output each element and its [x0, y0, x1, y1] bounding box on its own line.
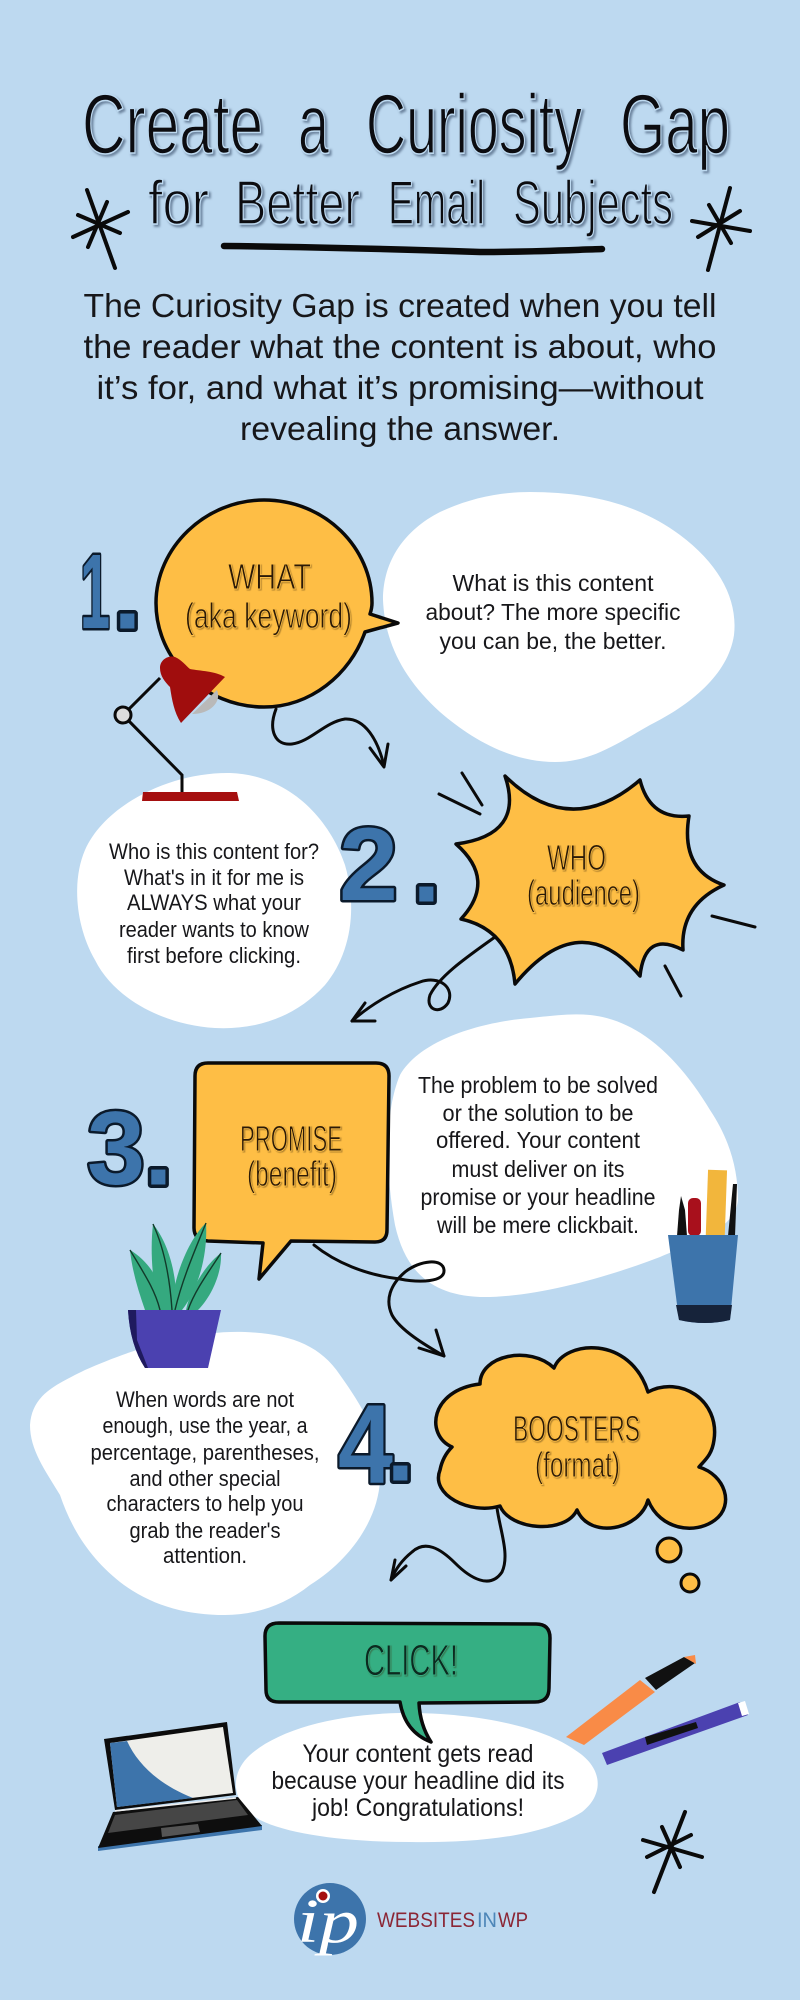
what heading: WHAT: [228, 556, 311, 597]
boosters subheading: (format): [535, 1444, 620, 1485]
who description text: Who is this content for?: [109, 839, 319, 864]
white blob: promise description: [388, 1014, 738, 1297]
speech bubble: promise: [194, 1063, 389, 1279]
click description text: because your headline did its: [272, 1767, 564, 1795]
boosters description text: percentage, parentheses,: [90, 1440, 320, 1465]
subtitle underline: [224, 246, 602, 252]
logo: websites in wp: [294, 1883, 528, 1956]
icon: left star: [73, 190, 128, 268]
click description text: Your content gets read: [302, 1740, 534, 1768]
white blob: who description: [77, 773, 351, 1028]
title: Curiosity: [366, 77, 582, 171]
white blob: boosters description: [30, 1332, 380, 1615]
title: Create: [82, 77, 263, 171]
title: a: [298, 77, 329, 171]
intro paragraph: it’s for, and what it’s promising—without: [96, 369, 704, 406]
icon: orange pen: [566, 1655, 696, 1745]
what description text: about? The more specific: [426, 599, 680, 625]
panel: step 1 what: [80, 492, 735, 767]
promise description text: must deliver on its: [452, 1156, 624, 1182]
boosters description text: When words are not: [116, 1387, 294, 1412]
icon: desk lamp: [115, 657, 239, 801]
promise description text: will be mere clickbait.: [436, 1212, 639, 1238]
panel: step 4 boosters: [30, 1223, 726, 1615]
boosters description text: characters to help you: [106, 1491, 304, 1516]
speech bubble: what: [156, 500, 398, 707]
number 1: 1: [80, 533, 110, 651]
what description text: [426, 570, 680, 654]
header: [73, 77, 750, 447]
panel: step 2 who: [77, 773, 755, 1028]
logo mark: [294, 1883, 366, 1956]
cloud bubble: boosters: [436, 1348, 726, 1528]
arrow: what to who: [273, 709, 388, 767]
number 2: 2: [339, 807, 398, 923]
panel: click: [98, 1623, 749, 1851]
boosters description text: [90, 1387, 320, 1568]
boosters description text: enough, use the year, a: [102, 1413, 308, 1438]
icon: right star: [692, 188, 750, 270]
title: [82, 77, 730, 171]
logo wordmark: IN: [477, 1909, 497, 1932]
promise description text: offered. Your content: [436, 1127, 641, 1153]
who subheading: (audience): [527, 872, 640, 913]
arrow: boosters to click: [391, 1508, 505, 1581]
boosters description text: and other special: [130, 1466, 280, 1491]
subtitle: Subjects: [513, 169, 673, 238]
white blob: click description: [236, 1713, 598, 1842]
promise description text: or the solution to be: [442, 1100, 634, 1126]
title: Gap: [620, 77, 730, 171]
who description text: reader wants to know: [119, 917, 309, 942]
number 3: [87, 1091, 172, 1207]
icon: pen cup: [668, 1170, 738, 1323]
promise description text: The problem to be solved: [418, 1072, 658, 1098]
burst accent lines: [439, 773, 755, 996]
intro paragraph: [84, 287, 717, 447]
icon: bottom star: [643, 1812, 702, 1892]
what subheading: (aka keyword): [185, 595, 352, 636]
thought bubble dots: [657, 1538, 699, 1592]
intro paragraph: the reader what the content is about, who: [84, 328, 717, 365]
number 3: 3: [87, 1091, 145, 1207]
arrow: promise to boosters: [314, 1245, 444, 1356]
logo mark: ip: [297, 1888, 359, 1956]
speech bubble: click: [265, 1623, 550, 1742]
subtitle: Better: [235, 169, 360, 238]
white blob: what description: [383, 492, 735, 762]
number 4: .: [386, 1390, 414, 1502]
promise subheading: (benefit): [247, 1153, 337, 1194]
number 2: [339, 807, 440, 924]
logo wordmark: WP: [498, 1909, 528, 1932]
click description text: [272, 1740, 564, 1822]
what description text: you can be, the better.: [440, 628, 666, 654]
who description text: ALWAYS what your: [127, 890, 301, 915]
logo wordmark: WEBSITES: [377, 1909, 475, 1932]
icon: potted plant: [128, 1223, 221, 1368]
promise description text: [418, 1072, 658, 1238]
number 1: .: [114, 538, 141, 650]
panel: step 3 promise: [87, 1014, 738, 1356]
what description text: What is this content: [452, 570, 654, 596]
promise heading: PROMISE: [240, 1118, 342, 1159]
subtitle: [148, 169, 673, 238]
subtitle: for: [148, 169, 209, 238]
click description text: job! Congratulations!: [311, 1794, 524, 1822]
boosters heading: BOOSTERS: [513, 1408, 640, 1449]
subtitle: Email: [388, 169, 485, 238]
who heading: WHO: [547, 837, 606, 878]
who description text: What's in it for me is: [124, 865, 304, 890]
boosters description text: grab the reader's: [130, 1518, 280, 1543]
click heading: CLICK!: [364, 1636, 458, 1685]
intro paragraph: The Curiosity Gap is created when you tell: [84, 287, 716, 324]
intro paragraph: revealing the answer.: [240, 410, 560, 447]
icon: laptop: [98, 1722, 262, 1851]
arrow: who to promise: [352, 937, 495, 1021]
number 3: .: [144, 1094, 172, 1206]
number 4: 4: [338, 1382, 393, 1507]
burst bubble: who: [456, 776, 724, 984]
who description text: [109, 839, 319, 968]
number 2: .: [412, 812, 440, 924]
promise description text: promise or your headline: [420, 1184, 656, 1210]
boosters description text: attention.: [163, 1543, 247, 1568]
icon: purple marker: [602, 1701, 749, 1765]
who description text: first before clicking.: [127, 943, 301, 968]
